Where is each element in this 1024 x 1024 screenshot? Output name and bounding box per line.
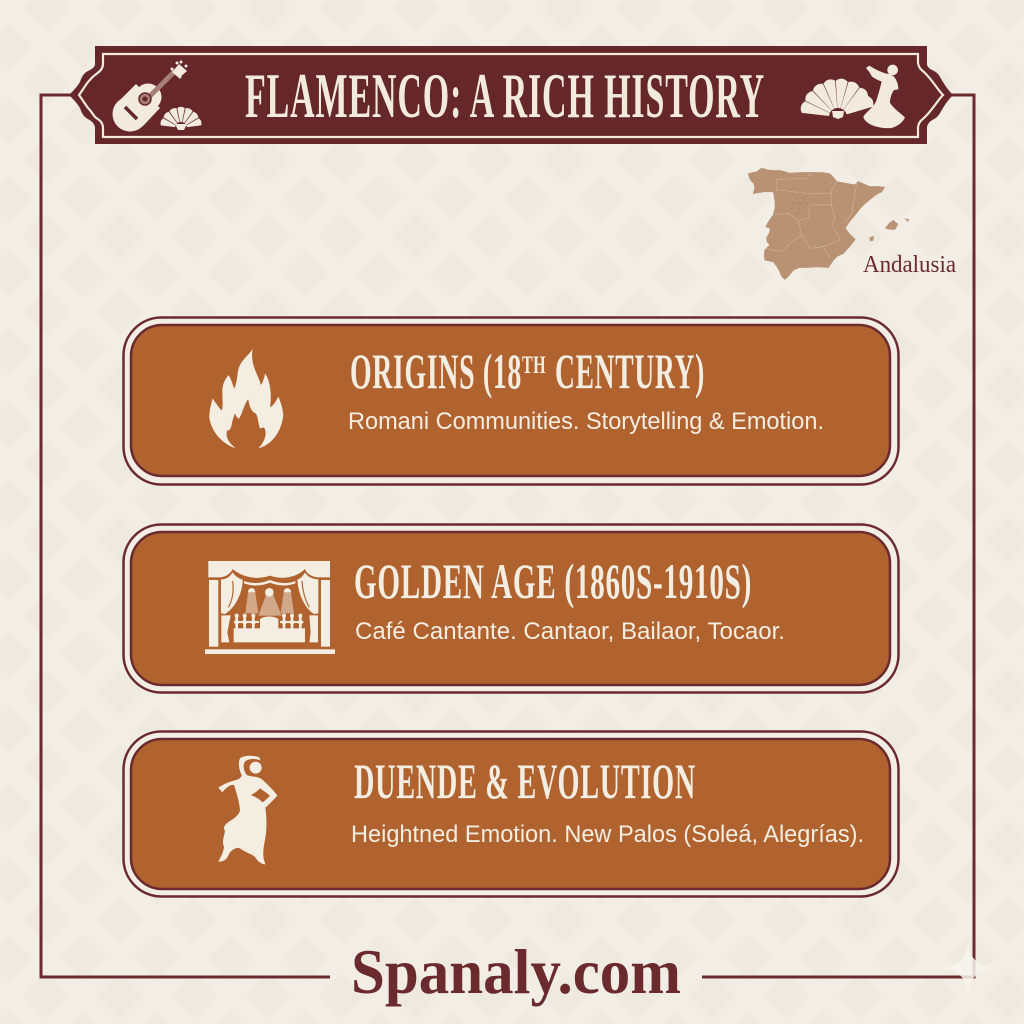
banner plaque bbox=[69, 46, 953, 144]
panel body bbox=[131, 532, 890, 685]
heading: ORIGINS (18 bbox=[350, 343, 522, 399]
icon: sparkle bbox=[943, 944, 993, 993]
icon: small fan bbox=[160, 107, 202, 130]
map label: Andalusia bbox=[863, 252, 956, 278]
footer brand: Spanaly.com bbox=[351, 936, 681, 1007]
heading: TH bbox=[522, 352, 546, 379]
panel: golden age bbox=[124, 524, 898, 692]
left curtain bbox=[221, 572, 243, 614]
panel body bbox=[131, 325, 890, 476]
map of Spain bbox=[748, 168, 956, 279]
panel outer outline bbox=[124, 524, 898, 692]
panel: origins bbox=[124, 318, 898, 484]
pelmet bbox=[208, 561, 330, 578]
heading: GOLDEN AGE (1860S-1910S) bbox=[354, 553, 752, 609]
panel body bbox=[131, 739, 890, 889]
panel outer outline bbox=[124, 732, 898, 896]
right curtain bbox=[297, 572, 318, 614]
heading: CENTURY) bbox=[555, 343, 705, 399]
banner inner line bbox=[79, 54, 943, 137]
description: Romani Communities. Storytelling & Emotion. bbox=[348, 408, 824, 435]
icon: dancer bbox=[218, 756, 277, 864]
icon: guitar bbox=[112, 60, 188, 132]
description: Café Cantante. Cantaor, Bailaor, Tocaor. bbox=[355, 618, 785, 645]
map shape bbox=[748, 168, 909, 279]
page frame bbox=[41, 95, 974, 977]
panel: duende and evolution bbox=[124, 732, 898, 896]
title banner bbox=[69, 46, 953, 144]
heading: DUENDE & EVOLUTION bbox=[354, 753, 696, 809]
panel outer outline bbox=[124, 318, 898, 484]
icon: flame bbox=[209, 348, 283, 448]
icon: large fan bbox=[799, 78, 875, 120]
icon: theatre stage bbox=[205, 561, 335, 654]
icon: banner dancer bbox=[863, 65, 905, 128]
description: Heightned Emotion. New Palos (Soleá, Alegrías). bbox=[351, 821, 864, 848]
